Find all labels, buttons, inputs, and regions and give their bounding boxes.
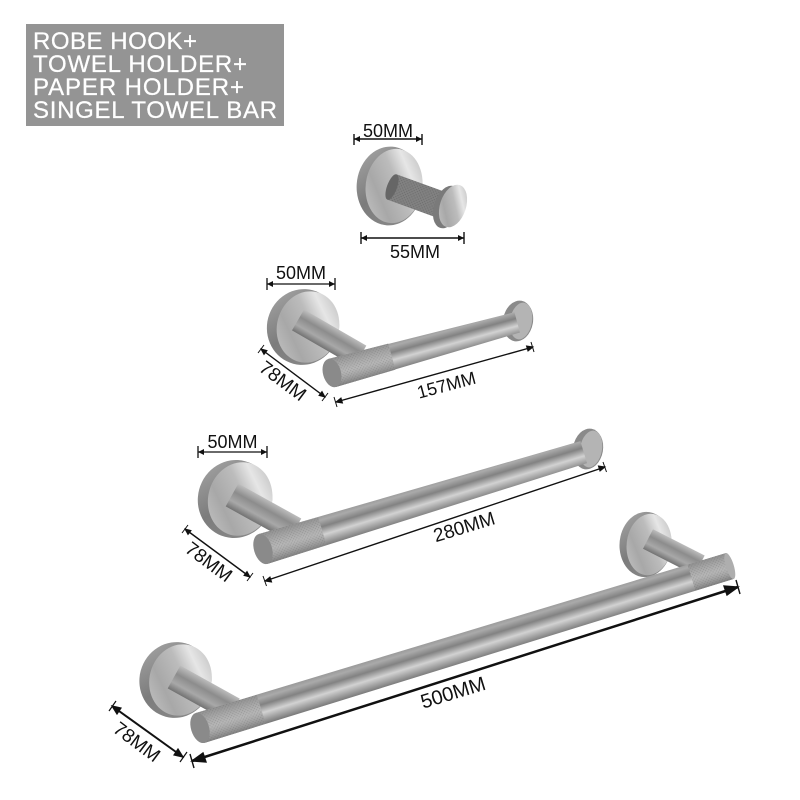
dimension: robe hook 55MM: 55MM <box>390 242 440 262</box>
dimension: towel holder 78MM: 78MM <box>181 538 236 587</box>
paper holder <box>258 281 536 389</box>
dimension: paper holder 78MM <box>255 345 328 406</box>
towel holder <box>189 426 606 566</box>
title panel: SINGEL TOWEL BAR <box>33 97 277 124</box>
dimension: towel holder 50MM <box>198 432 267 458</box>
robe hook <box>349 138 472 234</box>
dimension: towel holder 78MM <box>181 525 253 587</box>
dimension: towel holder 280MM <box>263 462 606 586</box>
dimension: paper holder 157MM <box>334 342 534 407</box>
dimension: towel holder 280MM: 280MM <box>431 508 498 547</box>
dimension: towel bar 500MM <box>190 580 740 768</box>
dimension: robe hook 50MM: 50MM <box>363 121 413 141</box>
dimension: towel holder 50MM: 50MM <box>207 432 258 452</box>
title panel: TOWEL HOLDER+ <box>33 51 247 78</box>
dimension: paper holder 50MM <box>267 263 335 290</box>
dimension: robe hook 55MM <box>361 232 464 262</box>
dimension: paper holder 78MM: 78MM <box>255 357 310 406</box>
dimension: robe hook 50MM <box>354 121 422 145</box>
dimension: paper holder 50MM: 50MM <box>276 263 326 283</box>
dimension: towel bar 500MM: 500MM <box>418 673 488 714</box>
title panel <box>26 24 284 126</box>
dimension: paper holder 157MM: 157MM <box>415 368 478 403</box>
dimension: towel bar 78MM <box>109 701 187 767</box>
title panel: PAPER HOLDER+ <box>33 74 244 101</box>
single towel bar <box>131 505 738 745</box>
dimension: towel bar 78MM: 78MM <box>109 718 164 767</box>
title panel: ROBE HOOK+ <box>33 28 197 55</box>
